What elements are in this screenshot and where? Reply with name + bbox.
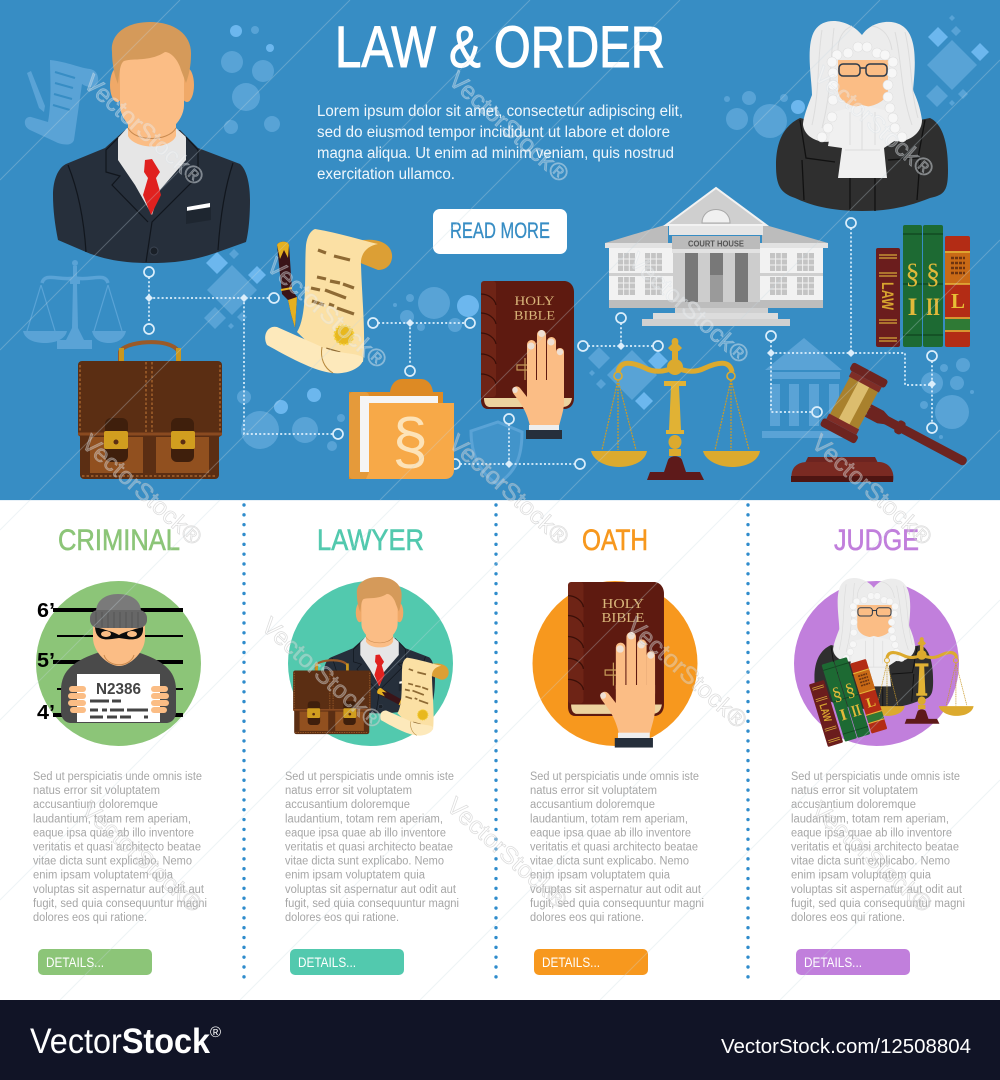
text block: oath description: vitae dicta sunt explicabo. Nemo [530, 856, 689, 868]
intro text: sed do eiusmod tempor incididunt ut labore et dolore [317, 124, 670, 141]
text block: judge description: veritatis et quasi architecto beatae [791, 842, 959, 854]
icon: judge with books and scales: § [843, 679, 857, 701]
text block: oath description: fugit, sed quia consequuntur magni [530, 898, 704, 910]
button: details criminal: DETAILS... [46, 954, 104, 970]
decorative light diamonds [206, 27, 989, 410]
text block: lawyer description: vitae dicta sunt explicabo. Nemo [285, 856, 444, 868]
watermark: VectorStock marks over the columns: VectorStock® [621, 612, 752, 734]
icon: law folder: § [392, 405, 428, 477]
button: details oath [534, 949, 648, 975]
icon: court house: COURT HOUSE [688, 238, 744, 248]
text block: oath description: laudantium, totam rem aperiam, [530, 813, 688, 825]
icon: judge with books and scales: L [864, 694, 878, 711]
heading: judge: JUDGE [834, 524, 919, 557]
icon: judge [776, 21, 948, 211]
panel: oath [530, 524, 704, 975]
text block: oath description: voluptas sit aspernatur aut odit aut [530, 884, 702, 896]
read more button [433, 209, 567, 254]
button: details lawyer: DETAILS... [298, 954, 356, 970]
decorative diamonds [204, 15, 977, 400]
text block: oath description: enim ipsam voluptatem quia [530, 870, 671, 882]
panel: blue hero banner [0, 0, 1000, 500]
text block: lawyer description: veritatis et quasi architecto beatae [285, 842, 453, 854]
text block: lawyer description: voluptas sit aspernatur aut odit aut [285, 884, 457, 896]
text block: criminal description: natus error sit voluptatem [33, 785, 160, 797]
button: details oath: DETAILS... [542, 954, 600, 970]
intro text: exercitation ullamco. [317, 166, 455, 183]
decorative light bubbles [230, 25, 805, 414]
icon: bible and hand: BIBLE [602, 611, 644, 626]
watermark: VectorStock marks over the banner: VectorStock® [808, 61, 939, 183]
watermark: VectorStock marks over the columns [76, 429, 937, 918]
text block: oath description: dolores eos qui ratione. [530, 912, 644, 924]
icon: law books: § [926, 259, 940, 290]
icon: criminal mugshot: 6’ [37, 600, 55, 622]
intro text: Lorem ipsum dolor sit amet, consectetur adipiscing elit, [317, 103, 683, 120]
icon: holy bible with hand: HOLY [514, 293, 555, 308]
text block: criminal description: enim ipsam voluptatem quia [33, 870, 174, 882]
footer url: VectorStock.com/12508804 [721, 1036, 971, 1058]
text block: oath description: veritatis et quasi architecto beatae [530, 842, 698, 854]
text block: lawyer description: dolores eos qui ratione. [285, 912, 399, 924]
text block: judge description: vitae dicta sunt explicabo. Nemo [791, 856, 950, 868]
ghost icon: shield [471, 422, 522, 484]
panel: judge [791, 524, 974, 975]
panel: lawyer [285, 524, 459, 975]
icon: judge with books and scales [794, 578, 974, 747]
icon: law folder [349, 379, 454, 479]
icon: gavel [791, 362, 983, 494]
text block: oath description: Sed ut perspiciatis unde omnis iste [530, 771, 699, 783]
text block: lawyer description: natus error sit voluptatem [285, 785, 412, 797]
icon: criminal mugshot: 4’ [37, 702, 55, 724]
text block: judge description: fugit, sed quia consequuntur magni [791, 898, 965, 910]
icon: golden scales [591, 338, 760, 480]
dotted column dividers [244, 505, 748, 977]
read more button: READ MORE [450, 218, 550, 243]
watermark: VectorStock marks over the columns: VectorStock® [443, 429, 574, 551]
text block: judge description: Sed ut perspiciatis unde omnis iste [791, 771, 960, 783]
text block: judge description [791, 771, 965, 924]
icon: judge with books and scales: I [837, 704, 849, 725]
icon: law books [876, 225, 970, 347]
watermark: VectorStock marks over the columns: VectorStock® [256, 612, 387, 734]
text block: lawyer description: Sed ut perspiciatis unde omnis iste [285, 771, 454, 783]
text block: criminal description: veritatis et quasi architecto beatae [33, 842, 201, 854]
icon: bible and hand [532, 581, 698, 748]
text block: oath description: eaque ipsa quae ab illo inventore [530, 827, 691, 839]
text block: judge description: enim ipsam voluptatem quia [791, 870, 932, 882]
intro text [317, 103, 683, 183]
icon: law books: I [908, 294, 917, 321]
ghost icon: courthouse [762, 338, 845, 438]
text block: lawyer description: laudantium, totam rem aperiam, [285, 813, 443, 825]
text block: criminal description: vitae dicta sunt explicabo. Nemo [33, 856, 192, 868]
text block: criminal description: dolores eos qui ratione. [33, 912, 147, 924]
icon: law books: L [951, 289, 965, 313]
text block: judge description: accusantium doloremque [791, 799, 916, 811]
button: details judge [796, 949, 910, 975]
panel: criminal [33, 524, 207, 975]
button: details criminal [38, 949, 152, 975]
watermark: VectorStock marks over the banner: VectorStock® [443, 66, 574, 188]
text block: oath description [530, 771, 704, 924]
text block: criminal description: laudantium, totam rem aperiam, [33, 813, 191, 825]
text block: judge description: eaque ipsa quae ab illo inventore [791, 827, 952, 839]
icon: court house [605, 188, 828, 326]
text block: judge description: natus error sit voluptatem [791, 785, 918, 797]
connector network [144, 218, 937, 469]
text block: criminal description: Sed ut perspiciatis unde omnis iste [33, 771, 202, 783]
footer bar [0, 1000, 1000, 1080]
text block: criminal description: voluptas sit aspernatur aut odit aut [33, 884, 205, 896]
watermark: VectorStock marks over the columns: VectorStock® [76, 796, 207, 918]
icon: holy bible with hand: BIBLE [514, 308, 555, 322]
text block: lawyer description: eaque ipsa quae ab illo inventore [285, 827, 446, 839]
icon: holy bible with hand [481, 281, 574, 439]
icon: contract scroll and pen [265, 229, 392, 373]
icon: judge with books and scales: II [849, 700, 863, 721]
text block: criminal description [33, 771, 207, 924]
icon: briefcase [78, 342, 222, 479]
footer logo: VectorStock [30, 1022, 210, 1061]
watermark: VectorStock marks over the banner [78, 61, 939, 374]
ghost icon: scroll [25, 60, 98, 145]
text block: lawyer description: enim ipsam voluptatem quia [285, 870, 426, 882]
icon: law books: LAW [878, 282, 897, 311]
text block: criminal description: eaque ipsa quae ab illo inventore [33, 827, 194, 839]
text block: judge description: voluptas sit aspernatur aut odit aut [791, 884, 963, 896]
icon: lawyer with briefcase and scroll [288, 577, 453, 746]
icon: judge with books and scales: LAW [816, 702, 833, 724]
icon: lawyer [53, 22, 250, 263]
icon: judge with books and scales: § [830, 683, 844, 705]
watermark: VectorStock marks over the banner: VectorStock® [623, 247, 754, 369]
heading: criminal: CRIMINAL [58, 524, 180, 557]
title: LAW & ORDER [335, 15, 665, 80]
text block: lawyer description: fugit, sed quia consequuntur magni [285, 898, 459, 910]
ghost icon: scales [23, 260, 126, 349]
section divider line [0, 500, 1000, 501]
heading: lawyer: LAWYER [317, 524, 424, 557]
icon: law books: II [926, 294, 940, 321]
decorative bubbles [221, 26, 974, 451]
watermark: VectorStock marks over the columns: VectorStock® [806, 429, 937, 551]
text block: lawyer description: accusantium doloremque [285, 799, 410, 811]
text block: lawyer description [285, 771, 459, 924]
text block: judge description: laudantium, totam rem aperiam, [791, 813, 949, 825]
text block: oath description: natus error sit voluptatem [530, 785, 657, 797]
text block: criminal description: fugit, sed quia consequuntur magni [33, 898, 207, 910]
intro text: magna aliqua. Ut enim ad minim veniam, quis nostrud [317, 145, 674, 162]
icon: law books: § [906, 259, 920, 290]
watermark: VectorStock marks over the columns: VectorStock® [806, 796, 937, 918]
icon: criminal mugshot: N2386 [96, 681, 141, 698]
button: details judge: DETAILS... [804, 954, 862, 970]
heading: oath: OATH [582, 524, 648, 557]
icon: criminal mugshot: 5’ [37, 650, 55, 672]
watermark: VectorStock marks over the columns: VectorStock® [441, 792, 572, 914]
watermark: VectorStock marks over the banner: VectorStock® [261, 252, 392, 374]
registered mark: ® [210, 1024, 221, 1041]
watermark: VectorStock marks over the banner: VectorStock® [78, 69, 209, 191]
button: details lawyer [290, 949, 404, 975]
text block: oath description: accusantium doloremque [530, 799, 655, 811]
text block: judge description: dolores eos qui ratione. [791, 912, 905, 924]
icon: bible and hand: HOLY [602, 597, 644, 612]
icon: criminal mugshot [36, 581, 201, 746]
watermark: VectorStock marks over the columns: VectorStock® [76, 429, 207, 551]
text block: criminal description: accusantium doloremque [33, 799, 158, 811]
